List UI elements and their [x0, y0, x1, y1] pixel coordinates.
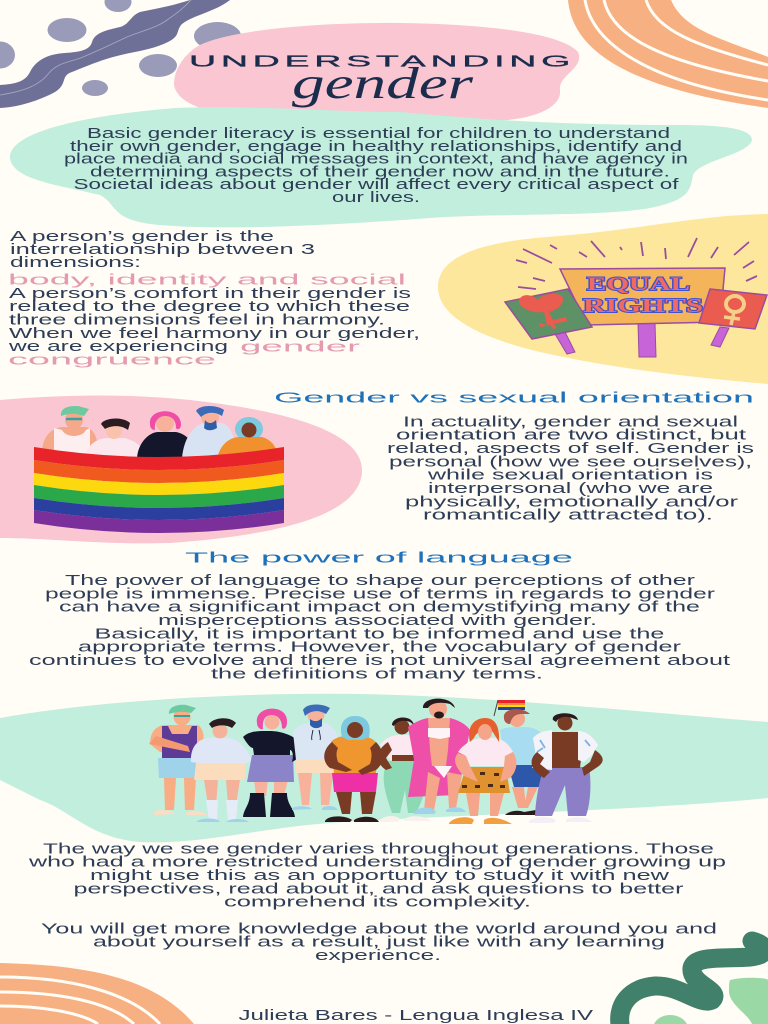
text block: intro: Societal ideas about gender will affect every critical aspect of — [74, 177, 680, 193]
person: open shirt purple trousers — [529, 713, 603, 823]
text block: more knowledge: experience. — [315, 948, 441, 964]
illustration: diverse group of people — [149, 699, 603, 824]
decoration: orange arcs bottom left — [0, 963, 194, 1024]
text block: generations: comprehend its complexity. — [224, 895, 531, 911]
person: blue shorts with flag — [494, 700, 544, 815]
person: pink robe — [408, 699, 470, 814]
text block: gender vs orientation: physically, emotionally and/or — [405, 494, 738, 510]
text block: gender vs orientation: romantically attracted to). — [423, 508, 713, 524]
text block: gender vs orientation: interpersonal (who we are — [428, 481, 713, 497]
text block: more knowledge: You will get more knowledge about the world around you and — [41, 921, 717, 937]
text block: generations: perspectives, read about it, and ask questions to better — [74, 881, 684, 897]
person: red hair leopard skirt — [449, 718, 516, 824]
heading: gender vs sexual orientation: Gender vs sexual orientation — [274, 390, 754, 406]
decoration: purple squiggle with dots — [0, 0, 241, 108]
decoration: green squiggles bottom right — [620, 941, 768, 1024]
text: pink highlighted terms: body, identity and social — [8, 272, 406, 288]
person: pink hair — [243, 709, 302, 817]
text block: gender vs orientation: In actuality, gender and sexual — [403, 414, 738, 430]
illustration: group behind rainbow flag — [42, 406, 277, 458]
title: UNDERSTANDING — [189, 54, 575, 70]
text block: intro: determining aspects of their gender now and in the future. — [90, 164, 670, 180]
icon: equal rights signs — [505, 238, 767, 357]
text: pink highlighted terms: gender — [240, 340, 360, 356]
title: gender — [292, 59, 474, 108]
text block: power of language: the definitions of many terms. — [211, 666, 543, 682]
title — [189, 54, 575, 108]
text block: gender dimensions: related to the degree to which these — [9, 299, 410, 315]
text block: gender dimensions: A person’s comfort in their gender is — [9, 286, 411, 302]
text block: gender vs orientation: personal (how we see ourselves), — [389, 454, 752, 470]
text block: intro: their own gender, engage in healthy relationships, identify and — [70, 139, 682, 155]
text block: power of language: people is immense. Precise use of terms in regards to gender — [45, 586, 715, 602]
text block: generations: The way we see gender varies throughout generations. Those — [43, 841, 714, 857]
text block: power of language: can have a significant impact on demystifying many of the — [59, 600, 700, 616]
text block: generations: might use this as an opportunity to study it with new — [90, 868, 670, 884]
person: mint trousers — [378, 717, 432, 822]
panel: pink flag blob — [0, 395, 362, 543]
heading: the power of language: The power of language — [185, 550, 573, 566]
panel: intro blob — [10, 107, 752, 227]
footer credit: Julieta Bares - Lengua Inglesa IV — [238, 1008, 594, 1024]
person: blue hair and beard — [292, 704, 340, 810]
text: pink highlighted terms: congruence — [8, 352, 216, 368]
panel: title blob — [174, 23, 579, 121]
text block: gender dimensions: dimensions: — [10, 255, 141, 271]
text block: intro: our lives. — [332, 190, 420, 206]
text block: gender dimensions: A person’s gender is the — [10, 229, 274, 245]
chart: rainbow flag — [34, 447, 284, 533]
text block: generations — [27, 841, 726, 911]
text block: intro: place media and social messages in context, and have agency in — [64, 152, 688, 168]
text block: more knowledge — [41, 921, 717, 964]
text block: gender vs orientation — [387, 414, 754, 524]
text block: gender vs orientation: related, aspects of self. Gender is — [387, 441, 754, 457]
text block: intro: Basic gender literacy is essential for children to understand — [87, 126, 670, 142]
text block: gender dimensions — [7, 229, 420, 355]
icon: equal rights signs: RIGHTS — [583, 295, 703, 317]
text block: gender dimensions: When we feel harmony in our gender, — [9, 326, 420, 342]
text block: gender vs orientation: orientation are two distinct, but — [396, 428, 746, 444]
person: green hair — [149, 705, 208, 815]
text block: power of language: continues to evolve and there is not universal agreement about — [29, 653, 730, 669]
text block: intro — [64, 126, 688, 206]
text block: power of language — [29, 573, 730, 682]
text block: power of language: Basically, it is important to be informed and use the — [94, 626, 664, 642]
person: dark short hair — [191, 718, 252, 822]
decoration: orange arcs top right — [568, 0, 768, 108]
icon: equal rights signs: EQUAL — [587, 274, 690, 295]
text block: gender vs orientation: while sexual orientation is — [426, 468, 713, 484]
text block: power of language: misperceptions associated with gender. — [158, 613, 597, 629]
text block: gender dimensions: we are experiencing — [7, 339, 228, 355]
text: pink highlighted terms — [8, 272, 406, 368]
text block: generations: who had a more restricted understanding of gender growing up — [27, 855, 726, 871]
text block: power of language: The power of language to shape our perceptions of other — [65, 573, 695, 589]
text block: more knowledge: about yourself as a result, just like with any learning — [93, 935, 665, 951]
panel: yellow blob — [438, 214, 768, 384]
text block: gender dimensions: interrelationship between 3 — [10, 242, 315, 258]
panel: mint band — [0, 694, 768, 842]
text block: power of language: appropriate terms. However, the vocabulary of gender — [78, 640, 681, 656]
text block: gender dimensions: three dimensions feel in harmony. — [9, 312, 385, 328]
person: blue hair orange top — [324, 716, 383, 822]
